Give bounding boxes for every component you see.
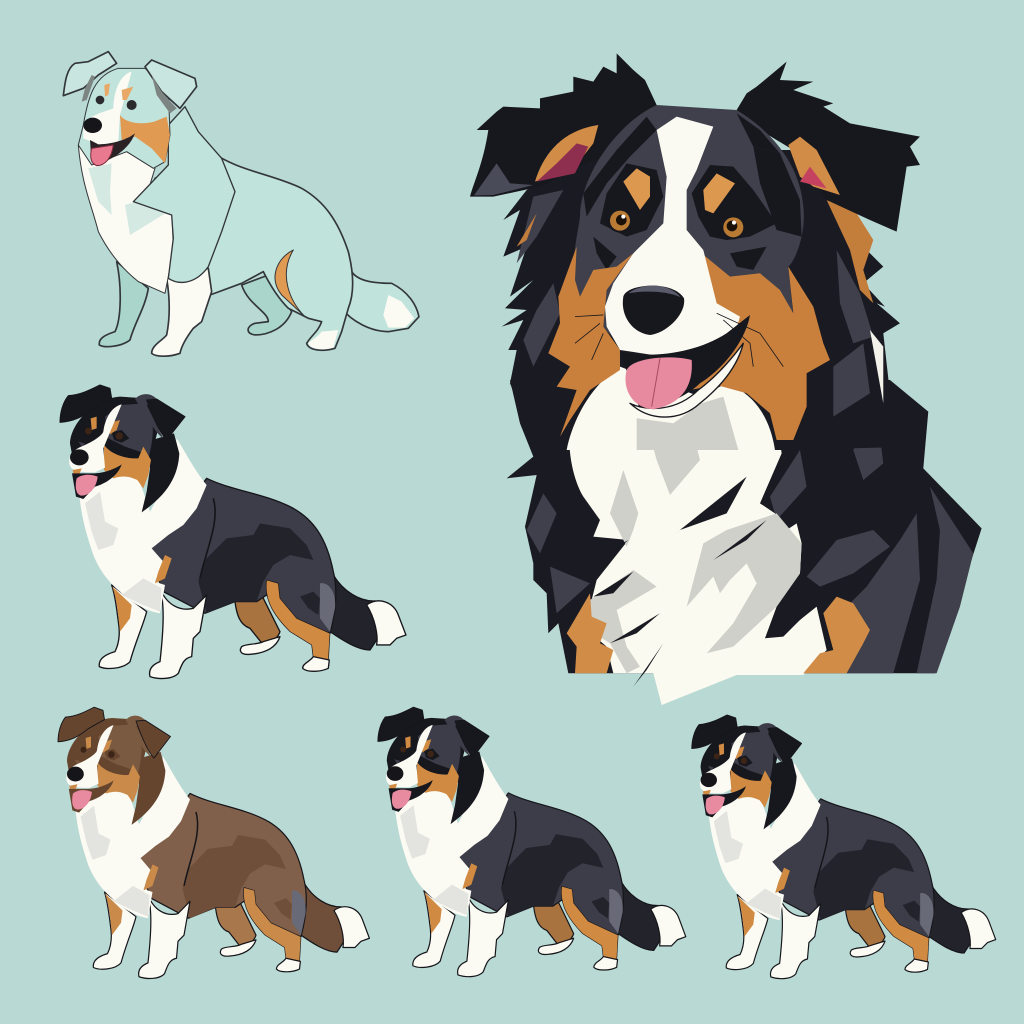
portrait: upper chest grey: [637, 397, 738, 450]
portrait: lower lip: [630, 343, 743, 417]
portrait: tongue: [625, 357, 692, 409]
mint dog: tan flank: [275, 250, 305, 317]
portrait: chest and shoulder: [507, 380, 982, 705]
mint dog: far front leg: [99, 262, 148, 347]
mint dog: ear shading: [82, 75, 177, 113]
mint dog: nose: [83, 118, 102, 133]
mint dog: left ear: [63, 52, 117, 96]
portrait: left under-eye patch: [593, 237, 617, 270]
mint dog: tail tip: [383, 295, 414, 328]
portrait: left eyebrow: [623, 168, 650, 210]
portrait: left ear tan: [535, 125, 598, 182]
portrait: right under-eye patch: [730, 247, 767, 270]
portrait: right eye: [721, 214, 746, 239]
illustration: mint outline dog: [63, 52, 419, 356]
mint dog: head: [78, 68, 170, 168]
portrait: grey shoulder fur: [527, 410, 973, 673]
portrait: nose: [623, 286, 684, 335]
portrait: head mane: [502, 150, 920, 450]
portrait: lower tan patches: [567, 593, 870, 673]
portrait: nose highlight: [628, 286, 681, 297]
portrait: black chest strokes: [583, 477, 813, 687]
portrait: face skull: [572, 105, 804, 350]
mint dog: far hind leg: [242, 275, 292, 335]
mint dog: neck mane: [133, 107, 235, 282]
portrait: cheek side black: [753, 147, 802, 237]
mint dog: body: [155, 152, 353, 350]
mint dog: eyes: [96, 96, 137, 110]
portrait: left eye mask: [600, 163, 663, 237]
portrait: right eye mask: [692, 165, 777, 240]
portrait: upper chest white: [567, 367, 775, 450]
mint dog: brows: [104, 83, 133, 100]
portrait: left ear: [470, 53, 657, 197]
mint dog: ruff: [78, 145, 173, 293]
mint dog: tail: [342, 272, 419, 332]
illustration: black tricolour dog, bottom centre: [378, 707, 686, 977]
portrait: left tan cheek: [548, 247, 633, 437]
portrait: white neck sliver: [870, 330, 883, 403]
portrait: mouth: [620, 315, 750, 410]
illustration: black tricolour dog, middle left: [60, 385, 406, 679]
portrait: left mane tan: [517, 213, 537, 247]
portrait: large dog head and chest: [470, 53, 982, 705]
portrait: forehead black near ears: [583, 113, 780, 217]
mint dog: tongue: [91, 145, 113, 166]
mint dog: tan cheek: [120, 115, 170, 163]
portrait: left ear pink: [537, 143, 588, 182]
portrait: head: [470, 53, 920, 450]
mint dog: hind paw: [308, 330, 338, 349]
portrait: left eye: [607, 207, 633, 233]
portrait: black body silhouette: [507, 380, 982, 673]
portrait: right tan cheek: [690, 253, 830, 440]
mint dog: near front leg: [152, 268, 212, 356]
portrait: right ear tan: [788, 137, 840, 195]
mint dog: mouth: [90, 133, 135, 160]
portrait: white chest fur: [569, 400, 827, 705]
mint dog: right ear: [145, 60, 197, 108]
portrait: right mane tan: [827, 200, 873, 303]
portrait: right ear pink: [800, 167, 827, 188]
portrait: white blaze and muzzle: [605, 117, 740, 357]
portrait: right ear: [737, 62, 920, 232]
mint dog: blaze: [83, 72, 132, 145]
mint dog: ruff shading: [88, 163, 172, 235]
portrait: right eyebrow: [703, 173, 735, 213]
illustration: black tricolour dog, bottom right: [692, 715, 996, 979]
portrait: left ear highlight: [474, 163, 533, 195]
portrait: grey chest shading: [583, 413, 802, 673]
portrait: mane highlights: [517, 190, 873, 417]
illustration: brown tricolour dog, bottom left: [58, 707, 369, 978]
portrait: whiskers: [575, 313, 783, 367]
portrait: tongue centre line: [652, 358, 660, 407]
